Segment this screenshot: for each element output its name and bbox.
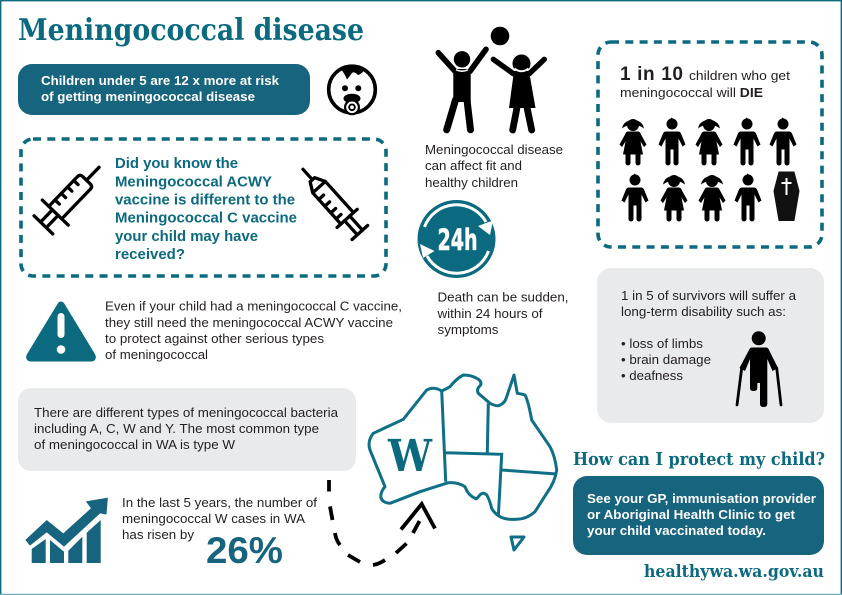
text: cases risen: In the last 5 years, the number of	[122, 496, 318, 510]
bullet list	[621, 337, 711, 383]
icon: 24 hours: 24h	[438, 223, 478, 257]
panel: types of bacteria: including A, C, W and Y. The most common type	[34, 422, 319, 436]
text: still need ACWY: they still need the meningococcal ACWY vaccine	[105, 316, 393, 330]
panel: long-term disability	[597, 268, 824, 423]
question text: vaccine is different to the	[115, 192, 295, 208]
heading: 1 in 10 children: 1 in 10	[620, 64, 683, 85]
text: fit and healthy: Meningococcal disease	[425, 143, 563, 157]
girl	[493, 54, 544, 130]
callout: children under 5	[18, 64, 310, 115]
Tasmania	[511, 537, 524, 550]
icon: syringe right	[293, 160, 370, 242]
map letter W: W	[387, 431, 433, 482]
text: death can be sudden: symptoms	[438, 323, 498, 337]
callout: see your GP: your child vaccinated today.	[587, 523, 766, 538]
text: cases risen: meningococcal W cases in WA	[122, 512, 306, 526]
bullet list: • loss of limbs	[621, 337, 703, 351]
website address: healthywa.wa.gov.au	[644, 562, 824, 581]
panel: types of bacteria	[18, 388, 356, 471]
heading: 1 in 10 children: children who get	[689, 69, 791, 83]
stat: 26%: 26%	[206, 530, 283, 571]
text: still need ACWY	[105, 300, 402, 362]
panel: 1 in 10	[598, 42, 822, 247]
panel: did you know	[21, 139, 386, 276]
icon: rising chart	[26, 498, 107, 563]
text: still need ACWY: to protect against other serious types	[105, 332, 324, 346]
boy	[438, 49, 486, 130]
icon: syringe left	[30, 155, 112, 237]
panel: long-term disability: long-term disability such as:	[621, 305, 786, 319]
callout: see your GP	[573, 476, 824, 555]
text: death can be sudden	[436, 290, 568, 337]
question text	[115, 156, 297, 263]
text: death can be sudden: Death can be sudden,	[438, 290, 568, 304]
icon: baby with pacifier	[329, 65, 375, 115]
callout: children under 5: of getting meningococcal disease	[41, 89, 255, 104]
panel: types of bacteria: of meningococcal in WA is type W	[34, 438, 235, 452]
icon: 24 hours	[418, 200, 496, 278]
bullet list: • brain damage	[621, 353, 711, 367]
question text: received?	[115, 247, 185, 263]
arrow: dashed path to WA	[329, 480, 435, 565]
text: fit and healthy: can affect fit and	[425, 159, 522, 173]
text: still need ACWY: of meningococcal	[105, 348, 208, 362]
heading: 1 in 10 children: meningococcal will DIE	[620, 86, 763, 100]
ball	[491, 27, 509, 45]
icon: person on crutches	[737, 331, 781, 407]
text: fit and healthy	[425, 143, 563, 190]
text: fit and healthy: healthy children	[425, 176, 518, 190]
panel: types of bacteria: There are different types of meningococcal bacteria	[34, 406, 338, 420]
pictogram: children row two	[622, 174, 762, 219]
title: Meningococcal disease	[18, 13, 364, 48]
callout: see your GP: See your GP, immunisation provider	[587, 491, 816, 506]
text: cases risen	[122, 496, 318, 542]
text: still need ACWY: Even if your child had a meningococcal C vaccine,	[105, 300, 402, 314]
map: Australia	[369, 375, 557, 550]
bullet list: • deafness	[621, 369, 683, 383]
question text: Did you know the	[115, 156, 238, 172]
panel: long-term disability: 1 in 5 of survivors will suffer a	[621, 289, 796, 303]
text: death can be sudden: within 24 hours of	[436, 307, 543, 321]
heading: 1 in 10 children	[620, 64, 791, 100]
icon: coffin	[774, 172, 799, 220]
pictogram: ten children row one	[620, 118, 796, 163]
icon: children playing	[438, 27, 544, 130]
question text: your child may have	[115, 229, 258, 245]
text: cases risen: has risen by	[122, 528, 195, 542]
callout: children under 5: Children under 5 are 12 x more at risk	[41, 73, 280, 88]
callout: see your GP: or Aboriginal Health Clinic to get	[587, 507, 796, 522]
icon: warning triangle	[30, 305, 92, 358]
question text: Meningococcal C vaccine	[115, 210, 297, 226]
question text: Meningococcal ACWY	[115, 174, 272, 190]
